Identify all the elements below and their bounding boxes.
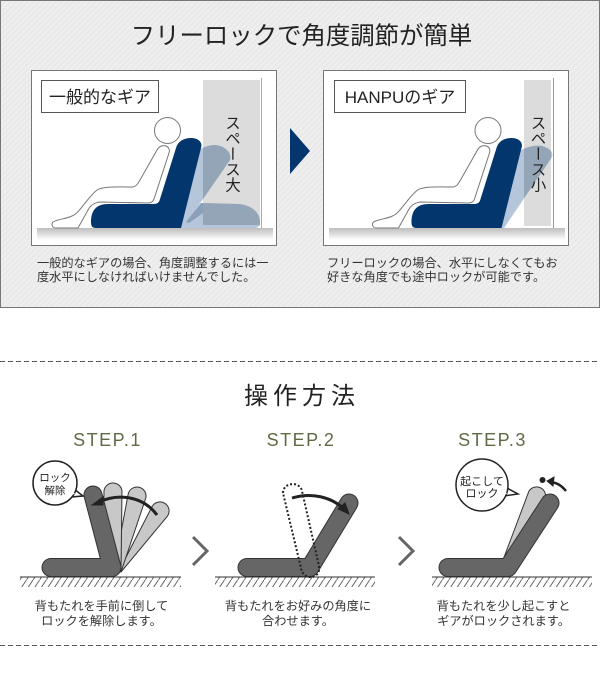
space zone: small [524, 80, 551, 226]
panel: HANPU gear [324, 70, 568, 246]
floor [215, 577, 375, 587]
step 2 title: STEP.2 [267, 430, 335, 450]
step 3 caption [437, 599, 570, 628]
caption: standard gear: 一般的なギアの場合、角度調整するには一 [37, 255, 269, 270]
chevron 2 [399, 537, 413, 565]
step 3 title: STEP.3 [458, 430, 527, 450]
curved arrow [92, 497, 157, 515]
callout: raise to lock [456, 459, 518, 511]
chevron 1 [193, 537, 207, 565]
seat and backrest [448, 503, 550, 568]
callout: unlock [33, 461, 83, 505]
step 1 title: STEP.1 [73, 430, 142, 450]
wall line [553, 78, 554, 228]
seat and backrest [247, 503, 349, 568]
label: HANPU gear [334, 80, 466, 112]
caption: standard gear: 度水平にしなければいけませんでした。 [37, 269, 255, 284]
reclined ghost backrest [180, 145, 230, 228]
floor [37, 228, 273, 240]
person and seat [52, 118, 201, 228]
title: フリーロックで角度調節が簡単 [131, 23, 472, 50]
floor [20, 577, 181, 587]
caption: HANPU gear: 好きな角度でも途中ロックが可能です。 [327, 269, 545, 284]
callout: raise to lock: ロック [466, 487, 498, 500]
floor [432, 577, 592, 587]
panel: free-lock comparison [0, 0, 600, 308]
label: standard gear [42, 80, 158, 112]
caption: HANPU gear [327, 256, 558, 284]
step 1 caption: 背もたれを手前に倒して [35, 598, 168, 613]
label: standard gear: 一般的なギア [49, 88, 151, 107]
label: HANPU gear: HANPUのギア [345, 88, 455, 107]
callout: raise to lock: 起こして [460, 475, 504, 488]
arrow: comparison [290, 128, 310, 174]
caption: standard gear [37, 255, 269, 284]
flat ghost seat [182, 203, 260, 228]
person and seat [372, 118, 522, 228]
small curved arrow [547, 477, 566, 491]
pivot dot [540, 477, 546, 483]
step 1 caption [35, 598, 168, 628]
callout: unlock: ロック [39, 472, 71, 484]
floor [329, 228, 565, 240]
heading: how to operate: 操作方法 [244, 383, 360, 410]
vertical label: small space: スペース小 [528, 115, 546, 194]
vertical label: large space: スペース大 [223, 115, 241, 193]
step 2 caption: 合わせます。 [262, 614, 334, 628]
step 1 [20, 430, 181, 628]
step 2 caption [225, 598, 371, 628]
reclined ghost backrest [500, 146, 552, 228]
step 2 caption: 背もたれをお好みの角度に [225, 598, 371, 613]
step 3 [432, 430, 592, 628]
seat [51, 495, 112, 568]
step 3 caption: 背もたれを少し起こすと [437, 599, 570, 613]
ghost backrests [102, 483, 169, 572]
ghost backrest [503, 487, 546, 560]
dotted original backrest [283, 484, 319, 577]
space zone: large [203, 80, 260, 226]
panel: standard gear [32, 70, 276, 246]
step 1 caption: ロックを解除します。 [41, 614, 162, 628]
caption: HANPU gear: フリーロックの場合、水平にしなくてもお [327, 256, 558, 270]
step 2 [215, 430, 375, 628]
step 3 caption: ギアがロックされます。 [437, 613, 570, 628]
wall line [261, 78, 262, 228]
callout: unlock: 解除 [44, 484, 66, 497]
curved arrow [292, 495, 349, 514]
